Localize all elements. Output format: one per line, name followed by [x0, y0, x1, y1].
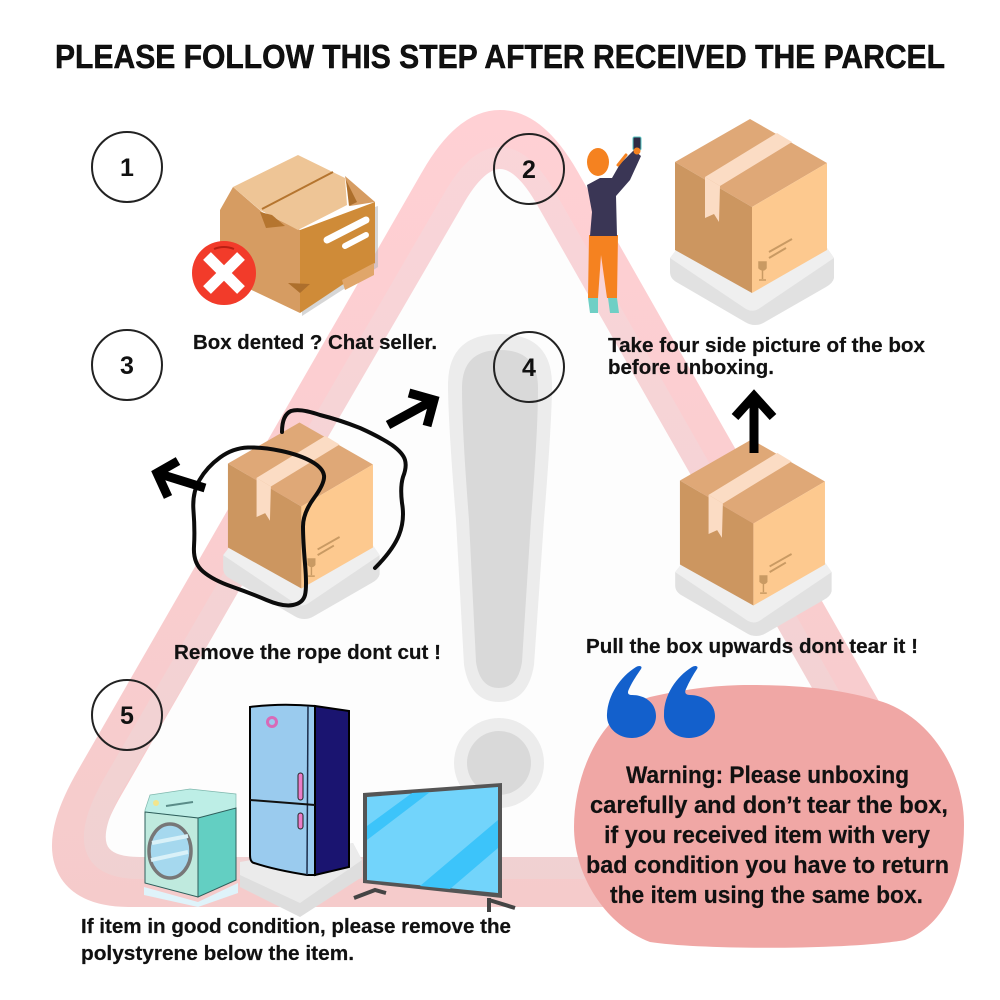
warning text: if you received item with very — [604, 822, 931, 849]
icon: fridge — [250, 705, 349, 875]
arrow: left pull — [157, 461, 205, 497]
step number 4 — [494, 332, 564, 402]
step number 2 — [494, 134, 564, 204]
warning text: the item using the same box. — [610, 882, 923, 909]
caption step 2 — [608, 335, 925, 379]
warning text: bad condition you have to return — [586, 852, 949, 879]
arrow: up — [735, 396, 773, 453]
warning text: Warning: Please unboxing — [626, 762, 909, 789]
callout: warning blob — [574, 666, 964, 948]
step number 1: 1 — [120, 154, 134, 182]
step number 2: 2 — [522, 156, 536, 184]
caption step 1: Box dented ? Chat seller. — [193, 332, 437, 354]
arrow: right pull — [388, 393, 434, 426]
exclamation mark — [448, 334, 552, 808]
caption step 5: polystyrene below the item. — [81, 943, 354, 965]
icon: person photographing — [587, 137, 641, 313]
icon: box, step 3 — [223, 423, 380, 619]
step number 5 — [92, 680, 162, 750]
icon: box, step 4 — [675, 440, 832, 636]
step number 3: 3 — [120, 352, 134, 380]
icon: box on polystyrene, step 2 — [670, 119, 834, 325]
caption step 5: If item in good condition, please remove the — [81, 916, 511, 938]
icon: polystyrene base — [240, 843, 362, 917]
icon: television — [354, 783, 515, 912]
step number 3 — [92, 330, 162, 400]
icon: red cross — [192, 241, 256, 305]
icon: dented box — [220, 155, 378, 316]
rope around box — [193, 410, 406, 605]
warning text — [586, 762, 949, 909]
step number 1 — [92, 132, 162, 202]
caption step 4: Pull the box upwards dont tear it ! — [586, 636, 918, 658]
caption step 2: before unboxing. — [608, 357, 774, 379]
caption step 3: Remove the rope dont cut ! — [174, 642, 441, 664]
warning triangle background — [77, 135, 926, 882]
step number 5: 5 — [120, 702, 134, 730]
step number 4: 4 — [522, 354, 536, 382]
caption step 5 — [81, 916, 511, 965]
icon: quotation marks — [607, 666, 715, 738]
caption step 2: Take four side picture of the box — [608, 335, 925, 357]
icon: washing machine — [144, 789, 238, 907]
warning text: carefully and don’t tear the box, — [590, 792, 948, 819]
